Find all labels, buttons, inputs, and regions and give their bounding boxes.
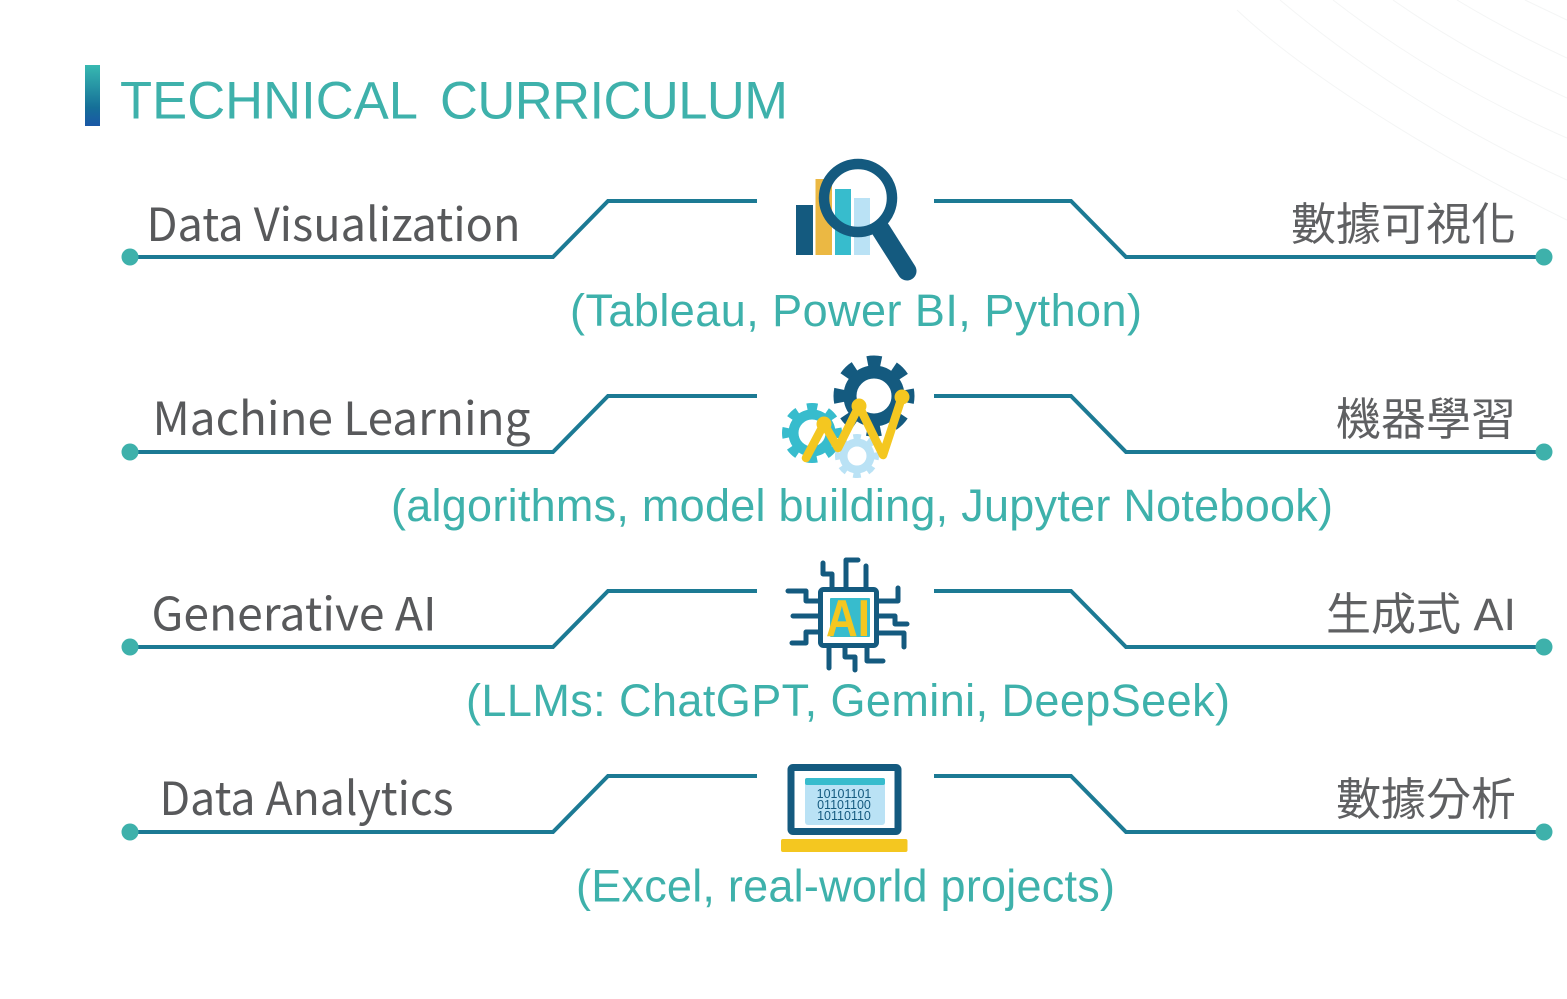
English label: Generative AI <box>152 578 436 644</box>
right connector <box>934 776 1552 840</box>
Chinese label: 數據可視化 <box>1291 199 1516 250</box>
icon: AI chip: AI <box>826 590 870 648</box>
heading: technical curriculum <box>85 65 788 130</box>
icon: AI chip <box>788 560 907 670</box>
row: machine learning <box>122 361 1552 531</box>
icon: laptop with binary: 10101101 <box>817 787 871 801</box>
right connector <box>934 591 1552 656</box>
right connector <box>934 201 1552 266</box>
row: generative AI <box>122 560 1552 726</box>
tools: (algorithms, model building, Jupyter Notebook) <box>391 480 1333 531</box>
tools: (LLMs: ChatGPT, Gemini, DeepSeek) <box>466 675 1230 726</box>
heading accent bar <box>85 65 100 126</box>
icon: laptop with binary: 01101100 <box>817 798 871 812</box>
tools: (Tableau, Power BI, Python) <box>570 285 1142 336</box>
Chinese label: 機器學習 <box>1336 394 1516 445</box>
English label: Data Visualization <box>146 189 520 255</box>
Chinese label: 生成式 AI <box>1326 589 1516 640</box>
icon: bar chart with magnifying glass <box>796 164 907 271</box>
row: data analytics <box>122 763 1552 912</box>
left connector <box>122 776 757 840</box>
heading text <box>120 72 788 130</box>
heading text: CURRICULUM <box>440 72 788 130</box>
English label: Data Analytics <box>160 763 454 829</box>
icon: laptop with binary <box>781 768 908 852</box>
left connector <box>122 396 757 460</box>
left connector <box>122 201 757 266</box>
heading text: TECHNICAL <box>120 72 418 130</box>
tools: (Excel, real-world projects) <box>576 860 1115 912</box>
icon: gears with trend line <box>786 361 910 476</box>
right connector <box>934 396 1552 460</box>
row: data visualization <box>122 164 1552 336</box>
English label: Machine Learning <box>152 383 531 449</box>
icon: laptop with binary: 10110110 <box>817 809 871 823</box>
Chinese label: 數據分析 <box>1336 774 1516 825</box>
left connector <box>122 591 757 656</box>
